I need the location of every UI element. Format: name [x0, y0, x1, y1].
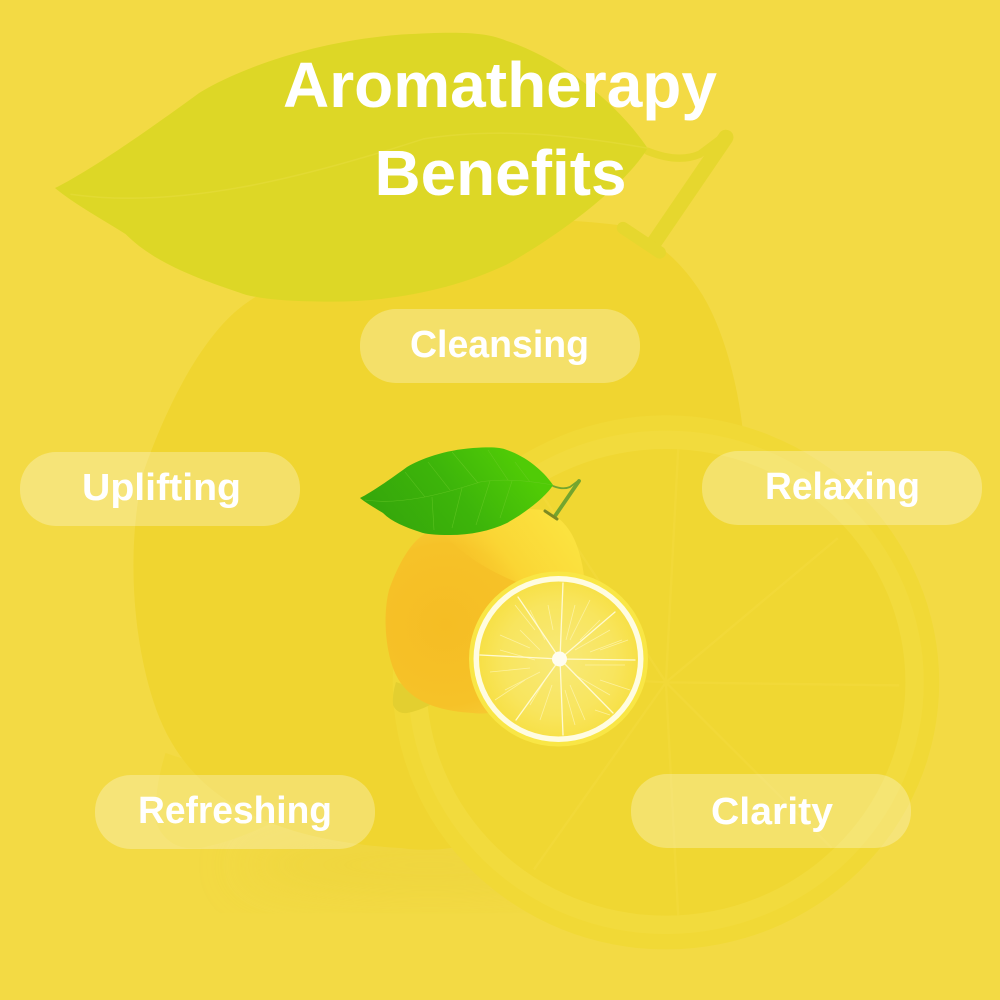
- pill: Cleansing: Cleansing: [410, 324, 589, 366]
- pill: Relaxing: [702, 451, 982, 525]
- pill: Refreshing: Refreshing: [138, 790, 332, 832]
- icon: stem: [545, 481, 579, 519]
- pill: Clarity: Clarity: [711, 791, 833, 833]
- title: Benefits: [374, 137, 626, 209]
- pill: Relaxing: Relaxing: [765, 466, 920, 508]
- icon: green leaf: [360, 447, 553, 535]
- icon: lemon nub: [393, 682, 430, 713]
- icon: lemon slice: [469, 572, 648, 746]
- pill: Uplifting: [20, 452, 300, 526]
- central lemon with leaf and slice: [360, 447, 648, 746]
- title: Aromatherapy: [283, 49, 717, 121]
- soft shadow under large lemon: [240, 843, 620, 887]
- icon: whole lemon: [386, 508, 585, 714]
- pill: Cleansing: [360, 309, 640, 383]
- title: [283, 49, 717, 209]
- pill: Clarity: [631, 774, 911, 848]
- pill: Uplifting: Uplifting: [82, 467, 241, 509]
- pill: Refreshing: [95, 775, 375, 849]
